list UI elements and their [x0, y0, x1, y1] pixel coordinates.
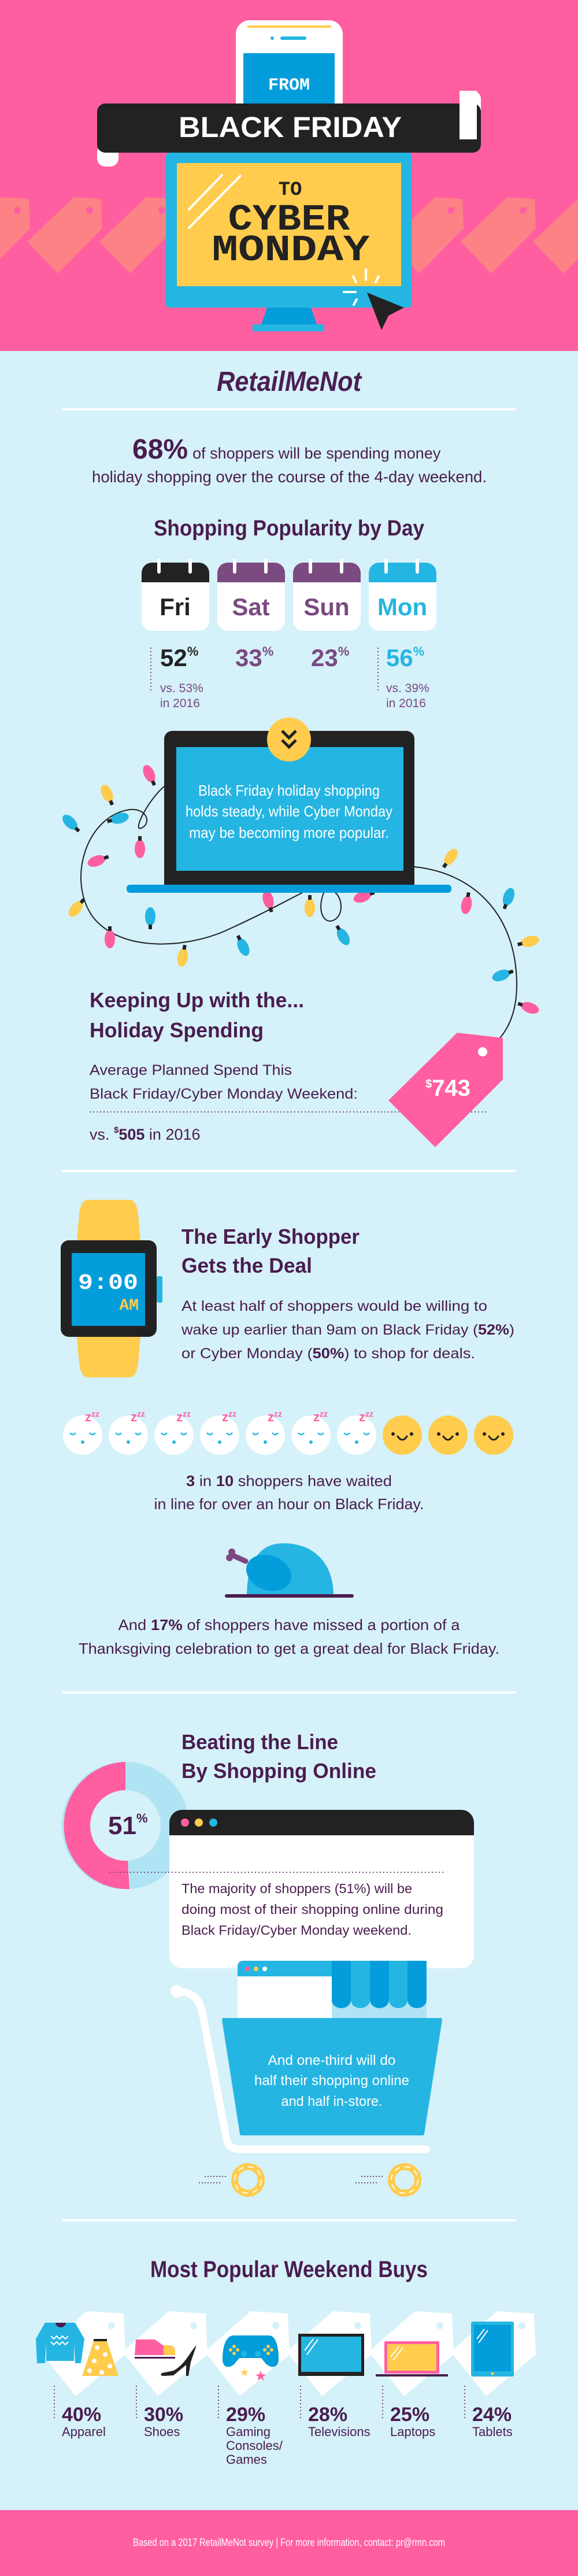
icon: cursor: [344, 269, 404, 330]
faces row: 7 sleeping, 3 awake: z: [222, 1410, 228, 1424]
monitor: to Cyber Monday: CYBER: [228, 199, 350, 241]
weekend buys items: Televisions: [308, 2425, 370, 2439]
calendar: Mon: [369, 559, 436, 631]
laptop callout: Black Friday holiday shopping: [198, 782, 380, 799]
icon: smartwatch 9:00 AM: 9:00: [78, 1271, 138, 1296]
browser window callout: The majority of shoppers (51%) will be: [181, 1881, 412, 1896]
shopping cart: [171, 1961, 440, 2193]
icon: smartwatch 9:00 AM: AM: [119, 1297, 139, 1315]
calendars: [142, 559, 436, 631]
shopping cart: and half in-store.: [281, 2094, 383, 2109]
browser window callout: Black Friday/Cyber Monday weekend.: [181, 1923, 412, 1938]
spending text: Average Planned Spend This: [90, 1062, 292, 1078]
weekend buys items: Shoes: [144, 2425, 180, 2439]
weekend buys items: Gaming: [226, 2425, 271, 2439]
intro stat: 68%: holiday shopping over the course of the 4-day weekend.: [92, 468, 487, 486]
weekend buys items: Consoles/: [226, 2438, 283, 2453]
calendar: Sat: [217, 559, 285, 631]
faces row: 7 sleeping, 3 awake: zz: [228, 1409, 236, 1418]
calendar: Fri: [142, 559, 209, 631]
monitor: to Cyber Monday: TO: [279, 179, 302, 201]
weekend buys items: 29%: [226, 2404, 265, 2426]
laptop callout: [127, 718, 451, 893]
day percentages: [151, 644, 429, 710]
heading: Beating the Line: [181, 1730, 376, 1783]
weekend buys items: Apparel: [62, 2425, 106, 2439]
weekend buys items: 30%: [144, 2404, 183, 2426]
text: 17% missed Thanksgiving: And 17% of shoppers have missed a portion of a: [118, 1616, 460, 1633]
weekend buys items: 40%: [62, 2404, 101, 2426]
footer: [0, 2510, 578, 2576]
early shopper text: [181, 1298, 514, 1362]
laptop callout: holds steady, while Cyber Monday: [186, 803, 392, 820]
text: 3 in 10: 3 in 10 shoppers have waited: [186, 1472, 392, 1490]
calendar: Fri: Fri: [160, 593, 191, 620]
faces row: 7 sleeping, 3 awake: z: [268, 1410, 274, 1424]
faces row: 7 sleeping, 3 awake: zz: [137, 1409, 145, 1418]
icon: turkey: [225, 1543, 354, 1598]
icon: apparel: [36, 2323, 118, 2376]
icon: tablet: [471, 2322, 514, 2377]
phone: [236, 20, 343, 136]
store awning: [332, 1961, 427, 2020]
spending text: 505: [118, 1126, 144, 1143]
shopping cart: half their shopping online: [254, 2073, 409, 2089]
mini browser: [238, 1961, 332, 2020]
price tag: $743: [388, 1033, 503, 1147]
calendar: Sat: Sat: [232, 593, 270, 620]
background price tags: [0, 197, 578, 274]
day percentages: %: [338, 644, 349, 659]
banner: Black Friday: [97, 91, 481, 167]
spending text: vs.: [90, 1126, 114, 1143]
icon: gaming controller: [223, 2335, 279, 2384]
heading: The Early Shopper: [181, 1225, 360, 1277]
weekend buys items: Games: [226, 2452, 267, 2467]
day percentages: in 2016: [386, 697, 426, 710]
logo: RetailMeNot: [217, 367, 362, 397]
day percentages: vs. 39%: [386, 682, 429, 695]
browser window callout: [109, 1810, 474, 1968]
early shopper text: At least half of shoppers would be willing to: [181, 1298, 487, 1314]
shopping cart: And one-third will do: [268, 2053, 395, 2068]
spending text: in 2016: [144, 1126, 201, 1143]
donut chart: 51%: [62, 1762, 189, 1889]
icon: gaming controller: ★: [254, 2368, 267, 2384]
browser window callout: doing most of their shopping online during: [181, 1902, 443, 1917]
day percentages: 56: [386, 644, 413, 671]
day percentages: 33: [235, 644, 262, 671]
day percentages: vs. 53%: [160, 682, 203, 695]
day percentages: %: [187, 644, 198, 659]
price tag: $743: $: [425, 1078, 432, 1091]
calendar: Sun: [293, 559, 361, 631]
heading: Keeping Up with the Holiday Spending: [90, 988, 304, 1042]
intro stat: 68%: [92, 434, 487, 486]
price tag: $743: 743: [432, 1076, 470, 1101]
faces row: 7 sleeping, 3 awake: z: [131, 1410, 137, 1424]
background tags: [40, 2311, 536, 2396]
faces row: 7 sleeping, 3 awake: zz: [320, 1409, 328, 1418]
faces row: 7 sleeping, 3 awake: z: [359, 1410, 365, 1424]
faces row: 7 sleeping, 3 awake: z: [85, 1410, 91, 1424]
heading: Beating the Line: Beating the Line: [181, 1730, 338, 1754]
spending text: Black Friday/Cyber Monday Weekend:: [90, 1086, 358, 1102]
intro stat: 68%: 68% of shoppers will be spending money: [132, 434, 441, 465]
calendar: Mon: Mon: [377, 593, 427, 620]
weekend buys items: [36, 2311, 536, 2467]
heading: Most Popular Weekend Buys: Most Popular Weekend Buys: [150, 2257, 428, 2282]
icon: smartwatch 9:00 AM: [61, 1200, 162, 1377]
faces row: 7 sleeping, 3 awake: z: [176, 1410, 183, 1424]
faces row: 7 sleeping, 3 awake: z: [313, 1410, 320, 1424]
icon: chevron badge: [267, 718, 311, 762]
donut chart: 51%: %: [136, 1811, 148, 1825]
faces row: 7 sleeping, 3 awake: zz: [274, 1409, 282, 1418]
heading: The Early Shopper: Gets the Deal: [181, 1254, 312, 1277]
donut chart: 51%: 51: [108, 1812, 136, 1840]
footer: Based on a 2017 RetailMeNot survey | For more information, contact: pr@rmn.com: [133, 2537, 445, 2548]
weekend buys items: 25%: [390, 2404, 429, 2426]
cart wheels: [199, 2167, 418, 2193]
banner: Black Friday: BLACK FRIDAY: [179, 111, 402, 143]
heading: Keeping Up with the Holiday Spending: Holiday Spending: [90, 1018, 264, 1042]
text: 17% missed Thanksgiving: [79, 1616, 499, 1657]
weekend buys items: Tablets: [472, 2425, 513, 2439]
phone: FROM: [268, 76, 310, 95]
header panel: [0, 0, 578, 351]
icon: gaming controller: ★: [240, 2367, 249, 2378]
calendar: Sun: Sun: [303, 593, 350, 620]
weekend buys items: 24%: [472, 2404, 512, 2426]
string of lights: [60, 763, 540, 1052]
day percentages: in 2016: [160, 697, 200, 710]
spending text: $: [114, 1125, 119, 1135]
icon: laptop: [376, 2341, 448, 2377]
stats labels: [54, 2386, 465, 2419]
faces row: 7 sleeping, 3 awake: zz: [365, 1409, 373, 1418]
weekend buys items: 28%: [308, 2404, 347, 2426]
text: 17% missed Thanksgiving: Thanksgiving celebration to get a great deal for Black Friday.: [79, 1640, 499, 1657]
faces row: 7 sleeping, 3 awake: zz: [91, 1409, 99, 1418]
icon: television: [298, 2334, 364, 2376]
spending text: [90, 1062, 488, 1143]
day percentages: %: [262, 644, 273, 659]
faces row: 7 sleeping, 3 awake: zz: [183, 1409, 191, 1418]
early shopper text: wake up earlier than 9am on Black Friday ( 52%): [181, 1322, 514, 1338]
text: 3 in 10: [154, 1472, 424, 1513]
faces row: 7 sleeping, 3 awake: [63, 1409, 513, 1455]
heading: The Early Shopper: The Early Shopper: [181, 1225, 360, 1248]
day percentages: %: [413, 644, 424, 659]
laptop callout: may be becoming more popular.: [189, 824, 389, 841]
heading: Keeping Up with the Holiday Spending: Keeping Up with the...: [90, 988, 304, 1012]
text: 3 in 10: in line for over an hour on Black Friday.: [154, 1495, 424, 1513]
icon: shoes: [135, 2340, 197, 2376]
early shopper text: or Cyber Monday ( 50%) to shop for deals.: [181, 1346, 475, 1362]
heading: Shopping Popularity by Day: Shopping Popularity by Day: [154, 516, 424, 541]
day percentages: 23: [311, 644, 338, 671]
day percentages: 52: [160, 644, 187, 671]
heading: Beating the Line: By Shopping Online: [181, 1759, 376, 1783]
weekend buys items: Laptops: [390, 2425, 435, 2439]
monitor: to Cyber Monday: MONDAY: [212, 230, 370, 272]
monitor: to Cyber Monday: [166, 153, 412, 331]
